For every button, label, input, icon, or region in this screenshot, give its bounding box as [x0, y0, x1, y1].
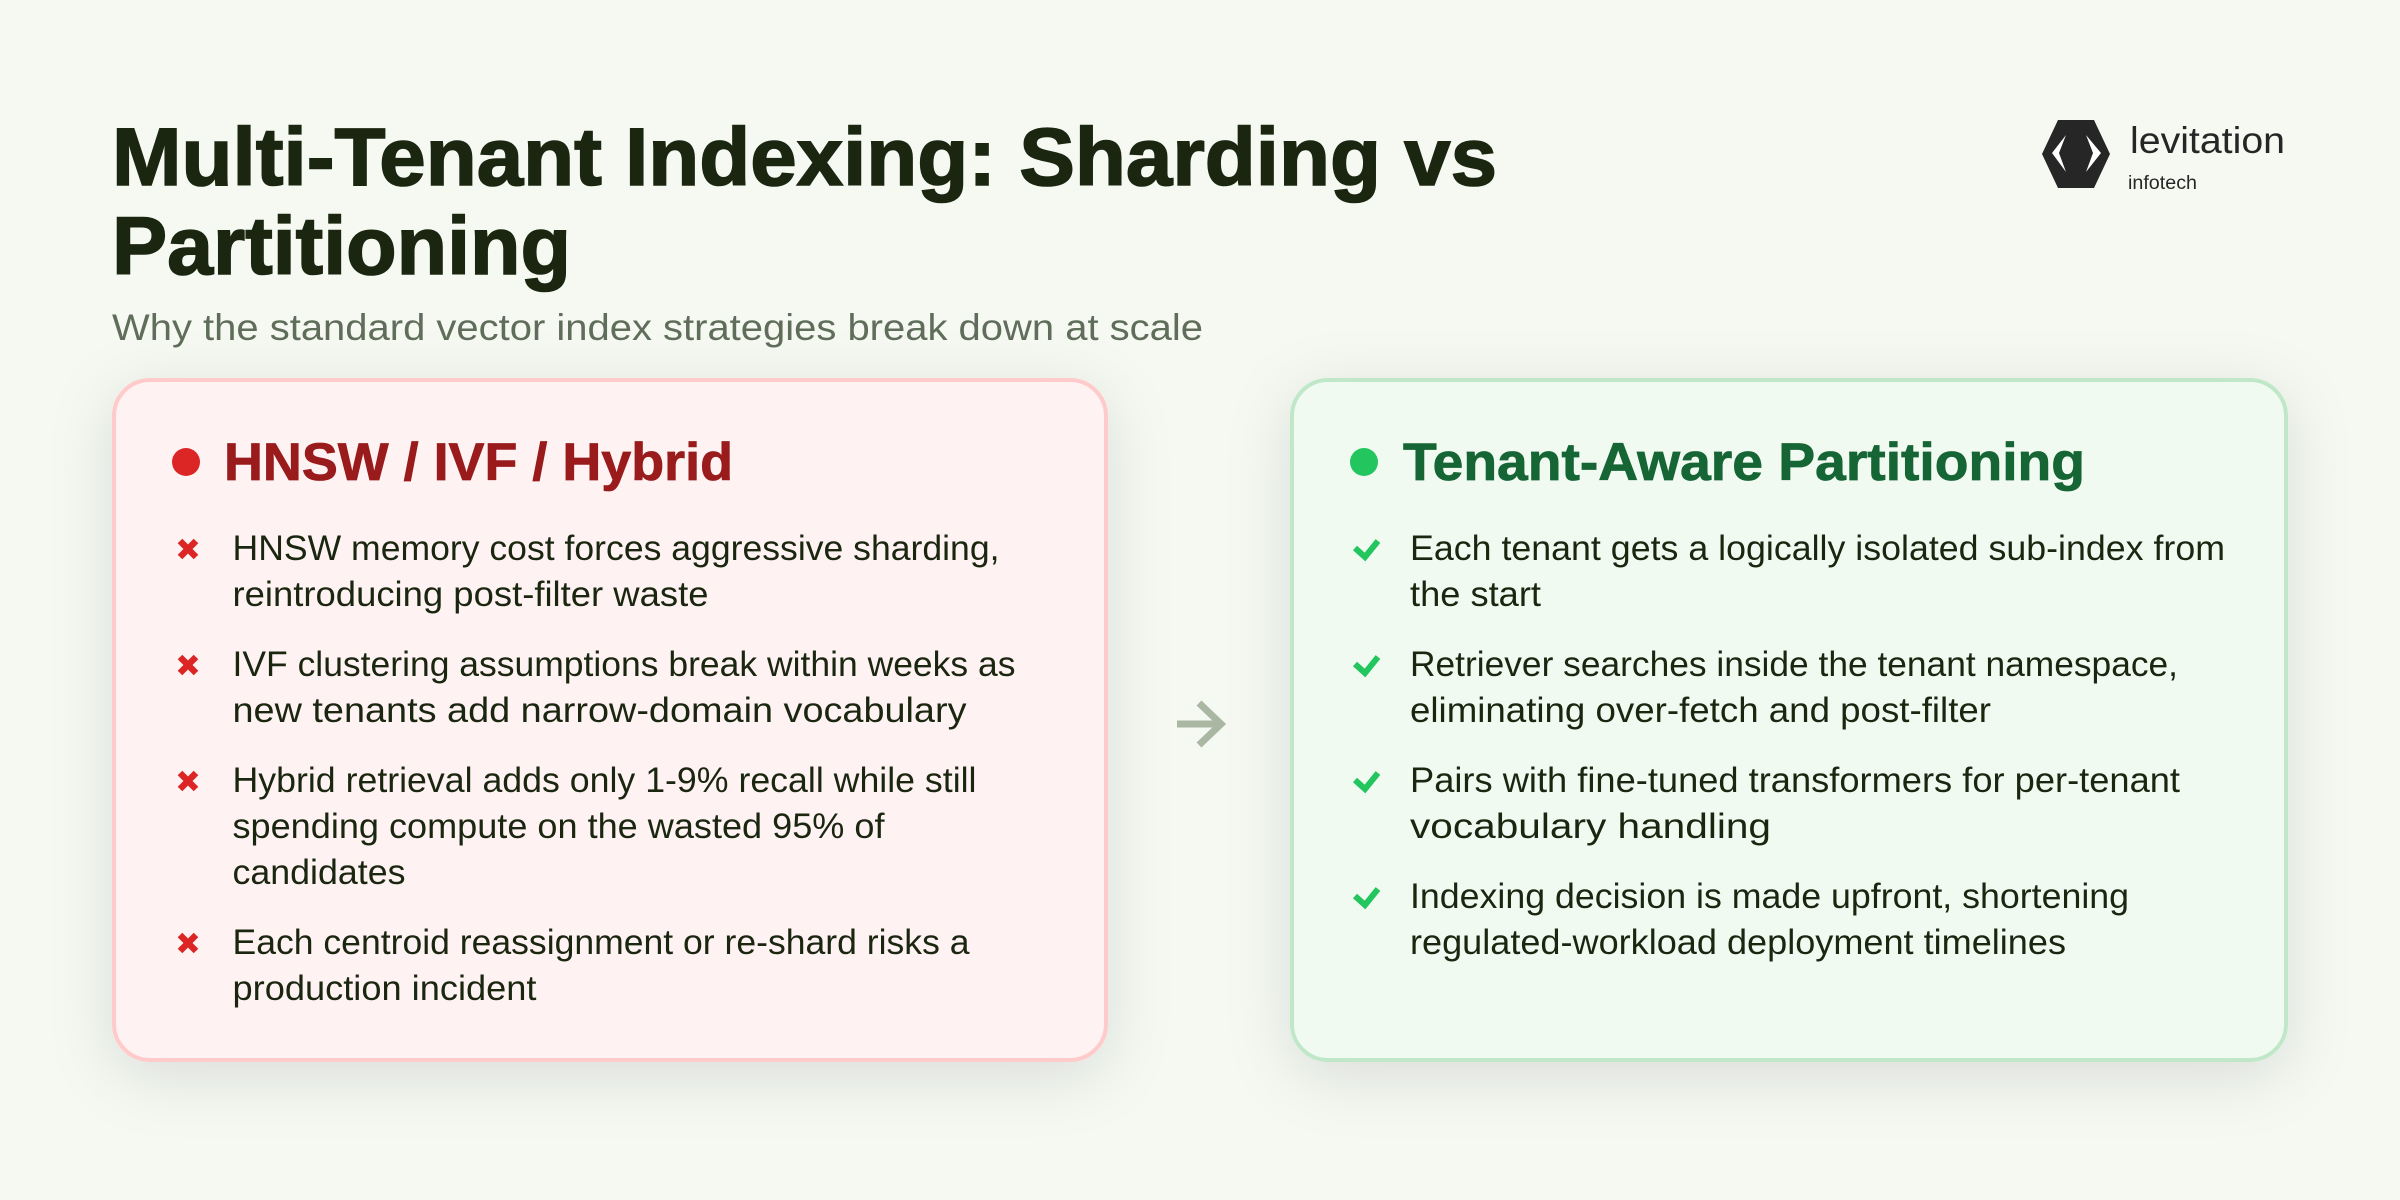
bullet: Hybrid retrieval: [180, 761, 976, 892]
bullet: retriever searches: eliminating over-fetch and post-filter: [1410, 691, 1991, 730]
title: Multi-Tenant Indexing: Sharding vs: [112, 112, 1497, 203]
subtitle: Why the standard vector index strategies break down at scale: [112, 307, 1203, 348]
status dot: red: [172, 448, 200, 476]
icon: hexagon logo mark: [2042, 120, 2110, 188]
logo sub-wordmark: infotech: [2128, 173, 2197, 194]
bullet: centroid reassignment: Each centroid reassignment or re-shard risks a: [232, 923, 970, 962]
bullet: IVF clustering: [180, 645, 1016, 730]
status dot: green: [1350, 448, 1378, 476]
bullet: indexing decision: [1355, 877, 2129, 962]
bullet: centroid reassignment: production incident: [232, 969, 537, 1008]
card background: [1292, 380, 2286, 1060]
bullet: Hybrid retrieval: spending compute on the wasted 95% of: [232, 807, 885, 846]
bullet: fine-tuned transformers: [1355, 761, 2180, 846]
panel: HNSW / IVF / Hybrid: [114, 380, 1106, 1060]
bullet: indexing decision: Indexing decision is made upfront, shortening: [1410, 877, 2129, 916]
bullet: HNSW memory cost: HNSW memory cost forces aggressive sharding,: [232, 529, 1000, 568]
bullet: HNSW memory cost: [180, 529, 1000, 614]
bullet: isolated sub-index: Each tenant gets a logically isolated sub-index from: [1410, 529, 2225, 568]
bullet: fine-tuned transformers: vocabulary handling: [1410, 807, 1771, 846]
bullet: Hybrid retrieval: Hybrid retrieval adds only 1-9% recall while still: [232, 761, 976, 800]
bullet: IVF clustering: IVF clustering assumptions break within weeks as: [232, 645, 1016, 684]
bullet: HNSW memory cost: reintroducing post-filter waste: [232, 575, 708, 614]
bullet: retriever searches: [1355, 645, 2178, 730]
bullet: fine-tuned transformers: Pairs with fine-tuned transformers for per-tenant: [1410, 761, 2180, 800]
logo wordmark: levitation: [2130, 120, 2285, 161]
panel: Tenant-Aware Partitioning: [1292, 380, 2286, 1060]
bullet: IVF clustering: new tenants add narrow-domain vocabulary: [232, 691, 967, 730]
bullet: retriever searches: Retriever searches inside the tenant namespace,: [1410, 645, 2178, 684]
title: [112, 112, 1497, 292]
bullet: centroid reassignment: [180, 923, 970, 1008]
title: Partitioning: [112, 201, 571, 292]
panel heading: HNSW / IVF / Hybrid: [224, 433, 733, 492]
card background: [114, 380, 1106, 1060]
bullet: isolated sub-index: [1355, 529, 2225, 614]
logo: levitation infotech: [2042, 120, 2285, 194]
panel heading: Tenant-Aware Partitioning: [1403, 433, 2085, 492]
bullet: indexing decision: regulated-workload deployment timelines: [1410, 923, 2066, 962]
bullet: Hybrid retrieval: candidates: [232, 853, 406, 892]
bullet: isolated sub-index: the start: [1410, 575, 1541, 614]
arrow: [1177, 703, 1222, 745]
